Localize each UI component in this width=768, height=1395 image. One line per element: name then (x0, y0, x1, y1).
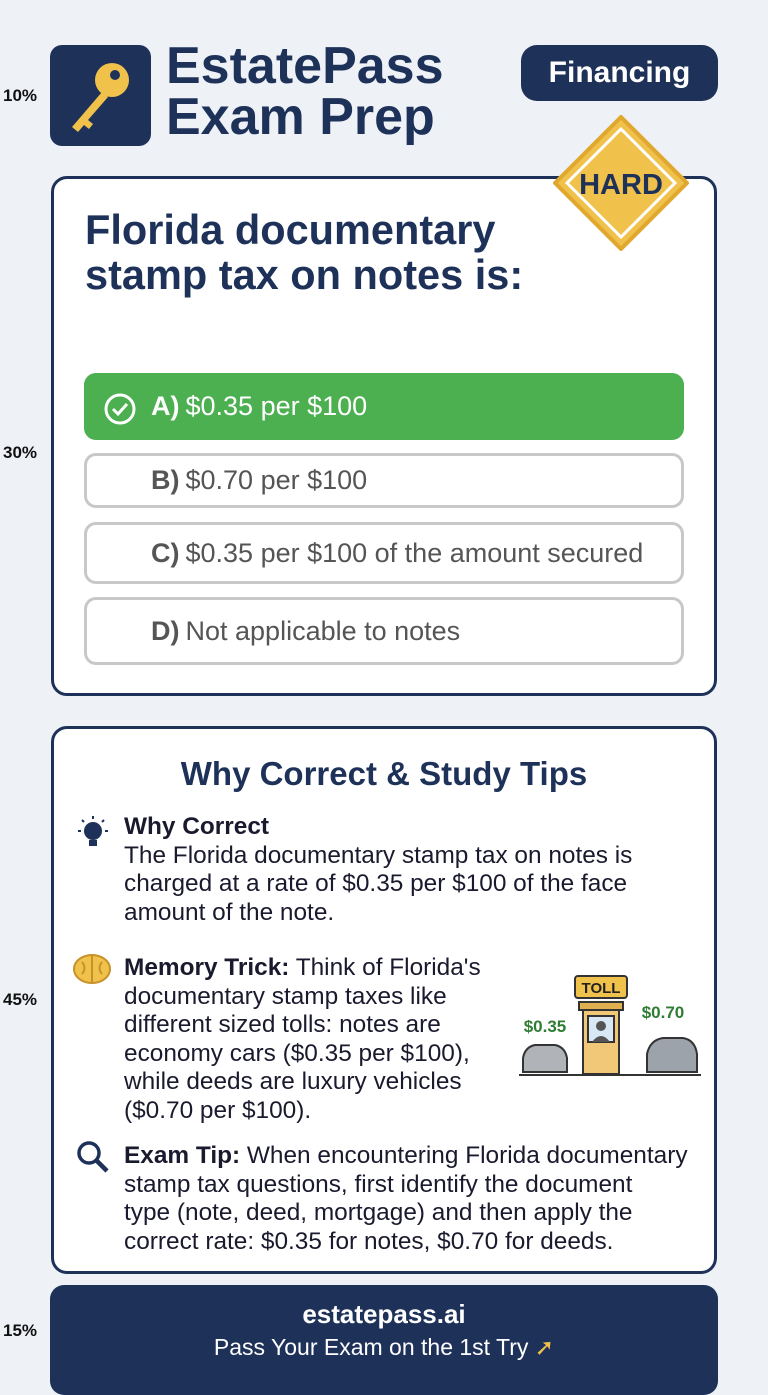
illustration: toll booth: $0.35 (524, 1017, 566, 1036)
badge: HARD (552, 114, 690, 252)
option C: $0.35 per $100 of the amount secured (186, 538, 643, 568)
text: memory trick: documentary stamp taxes like (124, 982, 447, 1010)
option B (84, 453, 684, 508)
text: why correct (124, 813, 632, 926)
icon: magnifier (77, 1141, 108, 1173)
illustration: toll booth (519, 975, 701, 1076)
option D: Not applicable to notes (186, 616, 460, 646)
title (166, 37, 444, 146)
option D (84, 597, 684, 665)
text: memory trick (124, 954, 481, 1124)
text: memory trick: while deeds are luxury vehicles (124, 1068, 462, 1095)
text: memory trick: Memory Trick: Think of Florida's (124, 954, 481, 981)
footer: estatepass.ai (302, 1299, 466, 1329)
icon: lightbulb (78, 816, 108, 846)
text: why correct: amount of the note. (124, 898, 334, 926)
option B: B) (151, 465, 180, 495)
side label 30%: 30% (3, 443, 37, 462)
text: memory trick: economy cars ($0.35 per $100), (124, 1040, 470, 1066)
panel: question (51, 176, 717, 696)
side label 45%: 45% (3, 990, 37, 1009)
side label 10%: 10% (3, 86, 37, 105)
text: why correct: Why Correct (124, 813, 269, 840)
icon: brain (73, 954, 111, 984)
question text (85, 206, 523, 298)
question text: stamp tax on notes is: (85, 251, 523, 298)
option C: C) (151, 538, 180, 568)
text: exam tip: stamp tax questions, first identify the document (124, 1170, 632, 1198)
text: exam tip (124, 1142, 688, 1254)
text: memory trick: different sized tolls: notes are (124, 1011, 441, 1038)
footer: Pass Your Exam on the 1st Try ➚ (214, 1334, 554, 1360)
badge: HARD: HARD (579, 169, 663, 201)
text: exam tip: correct rate: $0.35 for notes, $0.70 for deeds. (124, 1228, 613, 1254)
explanation heading: Why Correct & Study Tips (181, 755, 587, 792)
panel: explanation (51, 726, 717, 1274)
text: memory trick: ($0.70 per $100). (124, 1096, 311, 1124)
category pill: Financing (549, 56, 690, 89)
option A correct (84, 373, 684, 440)
option D: D) (151, 616, 180, 646)
category pill (521, 45, 718, 101)
text: why correct: charged at a rate of $0.35 per $100 of the face (124, 870, 627, 897)
side label 15%: 15% (3, 1321, 37, 1340)
option C (84, 522, 684, 584)
illustration: toll booth: TOLL (582, 980, 620, 997)
text: exam tip: type (note, deed, mortgage) and then apply the (124, 1199, 632, 1226)
text: exam tip: Exam Tip: When encountering Florida documentary (124, 1142, 688, 1169)
question text: Florida documentary (85, 206, 495, 253)
icon: key logo (50, 45, 151, 146)
option B: $0.70 per $100 (186, 465, 367, 495)
option A correct: A) (151, 391, 180, 421)
text: why correct: The Florida documentary stamp tax on notes is (124, 842, 632, 868)
title: EstatePass (166, 37, 444, 95)
option A correct: $0.35 per $100 (186, 391, 367, 421)
title: Exam Prep (166, 88, 435, 146)
illustration: toll booth: $0.70 (642, 1003, 684, 1022)
footer (50, 1285, 718, 1395)
